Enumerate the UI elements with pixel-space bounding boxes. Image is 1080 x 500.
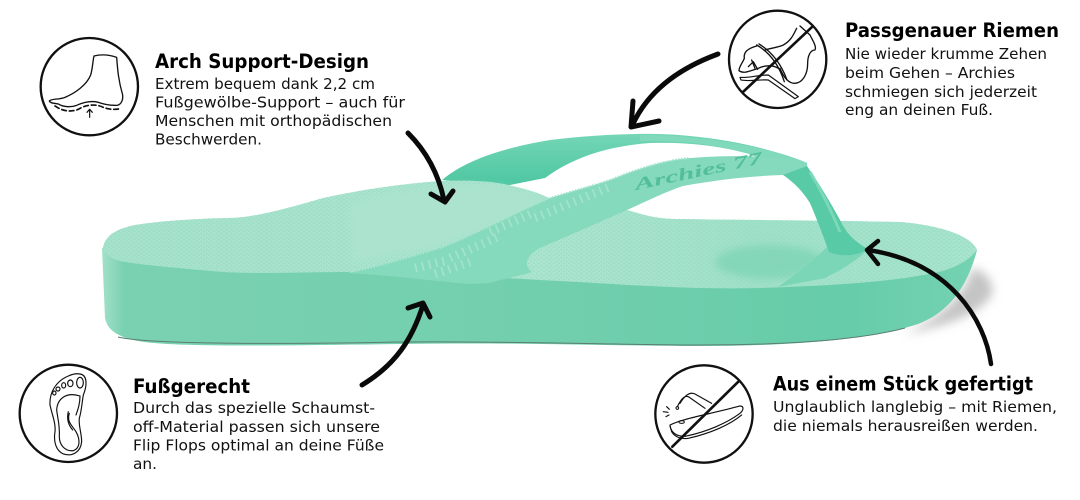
strap embossed edge <box>350 158 690 272</box>
arrow: foot shape <box>362 303 430 385</box>
toe post <box>783 166 868 255</box>
text: foot shape body: an. <box>133 455 157 473</box>
heading: Passgenauer Riemen: Passgenauer Riemen <box>845 19 1059 42</box>
arrow: strap <box>631 54 718 127</box>
text: foot shape body: Durch das spezielle Schaumst- <box>133 399 375 417</box>
heading: Fußgerecht: Fußgerecht <box>133 375 250 398</box>
heading: Aus einem Stück gefertigt: Aus einem Stück gefertigt <box>773 372 1033 396</box>
text: arch support body: Extrem bequem dank 2,2 cm <box>155 75 375 93</box>
text: strap body: schmiegen sich jederzeit <box>845 83 1037 101</box>
arrow: one piece <box>867 241 991 364</box>
sandal front strap with logo <box>348 156 807 284</box>
sandal footbed <box>103 181 977 288</box>
text: foot shape body <box>133 399 384 473</box>
icon: torn sandal crossed out <box>655 365 753 463</box>
sandal sole side wall <box>102 230 977 346</box>
strap logo text: Archies 77 <box>631 148 767 194</box>
heading: Arch Support-Design: Arch Support-Design <box>155 50 369 73</box>
text: arch support body: Fußgewölbe-Support – auch für <box>155 94 406 112</box>
strap embossed chevrons <box>415 186 612 274</box>
smooth arch area <box>350 186 545 262</box>
text: arch support body: Beschwerden. <box>155 130 262 148</box>
text: one piece body <box>773 398 1057 435</box>
sole bottom shadow line <box>118 328 905 345</box>
text: foot shape body: off-Material passen sich unsere <box>133 418 380 436</box>
text: one piece body: Unglaublich langlebig – mit Riemen, <box>773 398 1057 416</box>
text: strap body: beim Gehen – Archies <box>845 64 1015 82</box>
icon: foot sole <box>20 365 117 462</box>
text: arch support body: Menschen mit orthopädischen <box>155 112 392 130</box>
text: strap body <box>845 45 1047 119</box>
sandal back strap upper rim <box>640 135 807 170</box>
text: foot shape body: Flip Flops optimal an deine Füße <box>133 436 384 454</box>
icon: arch support foot <box>41 38 138 135</box>
arrow: arch support <box>408 133 453 202</box>
shading under toe post <box>715 245 825 279</box>
sandal shadow <box>905 268 992 334</box>
sandal: mint green flip flop <box>102 134 992 346</box>
toe post highlight <box>810 172 840 232</box>
text: strap body: eng an deinen Fuß. <box>845 101 993 119</box>
footbed dimple texture <box>103 181 977 288</box>
icon: crooked toes crossed out <box>729 11 826 108</box>
sandal back strap <box>442 134 807 186</box>
text: arch support body <box>155 75 406 148</box>
text: one piece body: die niemals herausreißen werden. <box>773 417 1038 435</box>
text: strap body: Nie wieder krumme Zehen <box>845 45 1047 63</box>
toe post base <box>778 225 868 287</box>
